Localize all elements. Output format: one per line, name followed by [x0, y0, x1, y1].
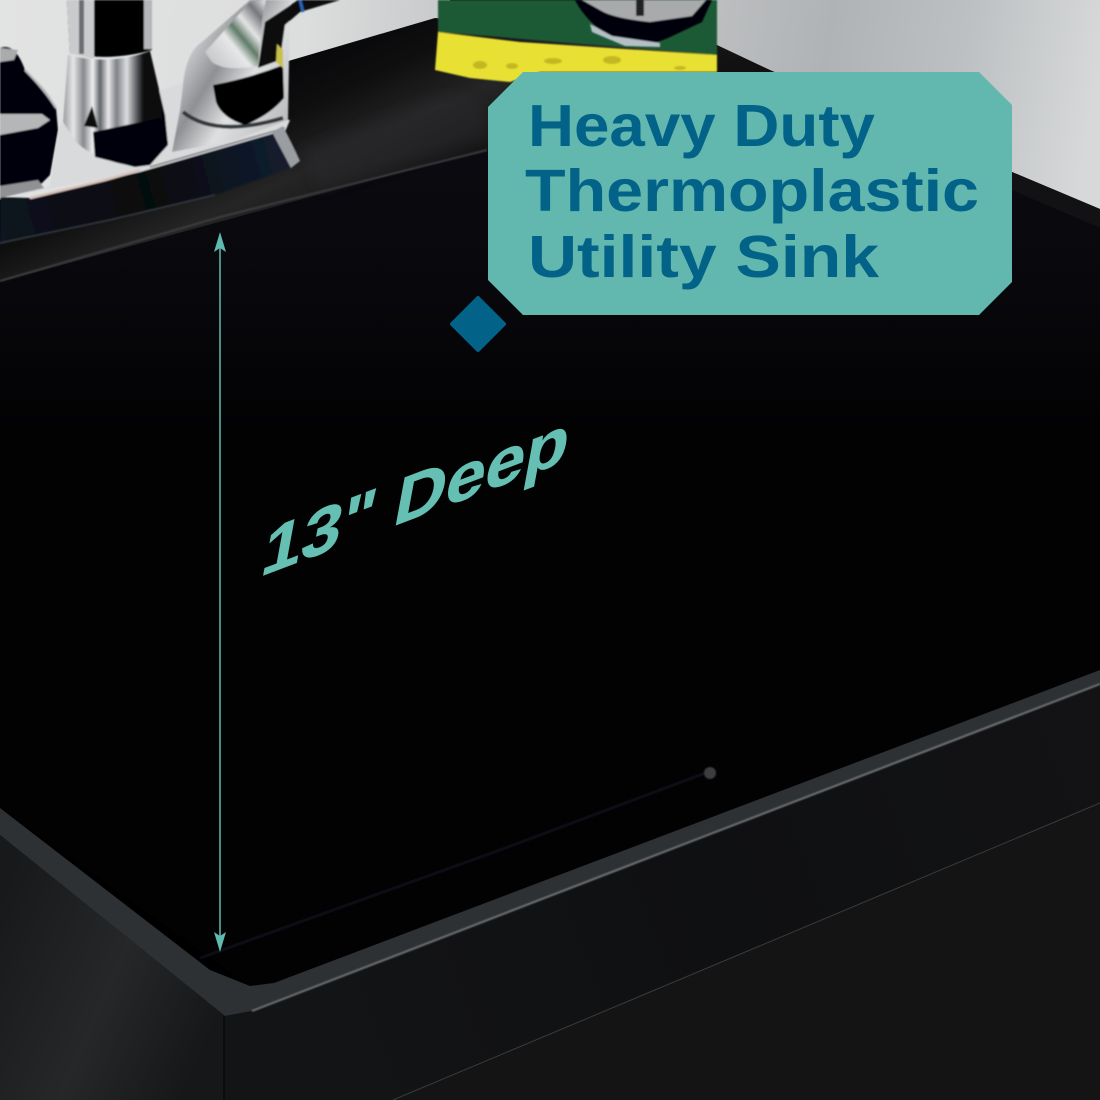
- neck chrome left: [67, 0, 94, 59]
- deck sheen: [300, 95, 488, 190]
- column shadow patch: [84, 106, 98, 128]
- left handle: [0, 47, 58, 197]
- lower right face: [393, 803, 1100, 1100]
- plate top surface: [0, 82, 290, 198]
- right handle lever: [205, 0, 266, 68]
- sponge scrubber: [438, 0, 717, 55]
- plate front: [0, 130, 300, 245]
- right handle black cup: [213, 65, 284, 125]
- right rim: [1012, 172, 1100, 228]
- faucet: [0, 0, 340, 245]
- back wall left: [0, 0, 450, 200]
- plate bottom edge: [0, 195, 215, 243]
- back wall right: [700, 0, 1100, 215]
- plate right chrome: [272, 126, 300, 168]
- lever dark side: [258, 0, 340, 68]
- left handle base chrome: [0, 180, 44, 198]
- arrowhead bottom: [214, 932, 226, 952]
- basin interior: [0, 148, 1100, 986]
- callout heading: Utility Sink: [528, 224, 879, 290]
- callout heading: [525, 93, 979, 290]
- right handle dome: [172, 0, 290, 152]
- basin floor line: [200, 772, 708, 958]
- lever blue band: [300, 0, 303, 12]
- neck chrome right: [144, 0, 152, 49]
- depth label: 13" Deep: [256, 399, 577, 592]
- sponge pores: [473, 56, 686, 70]
- faucet spout tip: [575, 0, 712, 47]
- corner edge: [223, 1016, 225, 1100]
- neck: [67, 0, 152, 57]
- spout chrome: [582, 0, 706, 22]
- column black band: [93, 118, 168, 167]
- callout heading: Heavy Duty: [528, 93, 875, 159]
- front rim top surface: [0, 670, 1100, 1016]
- spout body: [575, 0, 712, 47]
- column cone: [63, 51, 168, 167]
- crease line: [393, 803, 1100, 1100]
- right handle base rings: [183, 112, 283, 127]
- depth arrow: [214, 232, 226, 952]
- sponge foam: [435, 32, 717, 82]
- rim underside tint: [0, 148, 1100, 430]
- arrowhead top: [214, 232, 226, 252]
- deck front highlight: [0, 150, 487, 281]
- neck dark stripe: [79, 0, 84, 54]
- plate top edge line: [150, 128, 285, 167]
- spout dark streak: [636, 0, 644, 16]
- icon: diamond marker: [452, 298, 504, 350]
- left handle rim highlight: [25, 70, 56, 108]
- left outer face: [0, 835, 225, 1100]
- plate edge highlight: [30, 170, 140, 198]
- spout aerator ring: [590, 24, 660, 47]
- left handle mid chrome band: [0, 114, 50, 135]
- callout: product title: [488, 72, 1012, 315]
- sponge: [435, 0, 717, 82]
- rim highlight line: [252, 684, 1100, 1011]
- drain bump: [704, 767, 716, 779]
- lever yellow reflection: [276, 44, 283, 68]
- callout heading: Thermoplastic: [525, 158, 979, 224]
- sink deck and rim: [0, 18, 1100, 290]
- front right face: [225, 684, 1100, 1100]
- depth line: [219, 245, 221, 940]
- callout panel: [488, 72, 1012, 315]
- left handle top chrome: [0, 48, 18, 62]
